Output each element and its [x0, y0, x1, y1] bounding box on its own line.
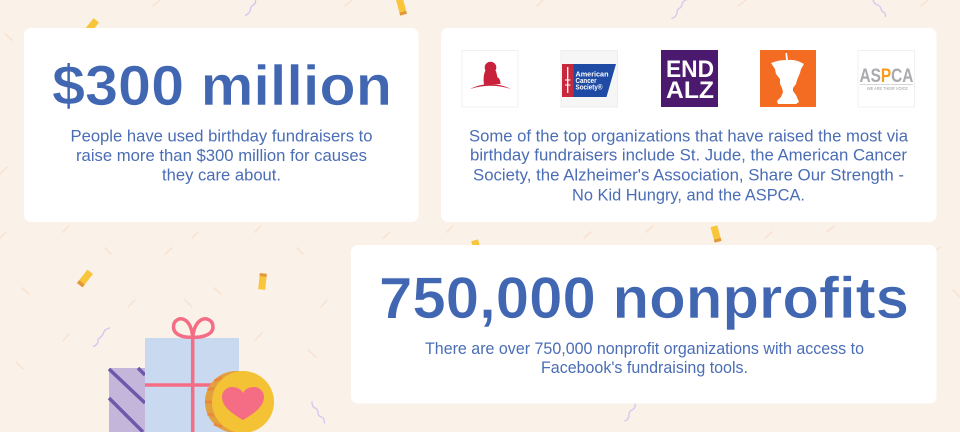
panel: 750,000 nonprofits	[351, 245, 936, 404]
icon: End Alz logo: END	[666, 56, 714, 83]
text block: top organizations: birthday fundraisers include St. Jude, the American Cancer	[470, 146, 908, 164]
icon: Share Our Strength apple core logo	[760, 50, 816, 107]
text block: birthday fundraisers: they care about.	[162, 166, 281, 184]
text block: birthday fundraisers	[70, 128, 372, 184]
text block: top organizations: No Kid Hungry, and the ASPCA.	[572, 186, 805, 204]
icon: ASPCA logo	[858, 50, 914, 107]
purple gift box	[109, 368, 145, 432]
icon: American Cancer Society logo: Cancer	[576, 78, 597, 85]
icon: ASPCA logo: ASPCA	[860, 64, 914, 86]
text block: birthday fundraisers: People have used birthday fundraisers to	[70, 128, 372, 146]
text block: nonprofit access: There are over 750,000 nonprofit organizations with access to	[425, 340, 864, 358]
icon: ASPCA logo: WE ARE THEIR VOICE	[867, 86, 908, 91]
text block: nonprofit access: Facebook's fundraising tools.	[541, 359, 748, 377]
text block: top organizations: Some of the top organizations that have raised the most via	[469, 128, 909, 146]
icon: End Alz logo	[661, 50, 718, 107]
icon: St. Jude logo	[462, 50, 518, 107]
icon: American Cancer Society logo: Society®	[576, 84, 603, 92]
text block: nonprofit access	[425, 340, 864, 377]
heading: 750,000 nonprofits: 750,000 nonprofits	[379, 266, 909, 331]
panel: $300 million	[24, 28, 418, 222]
heading: $300 million: $300 million	[52, 54, 392, 118]
icon: End Alz logo: ALZ	[666, 77, 714, 104]
icon: American Cancer Society logo: American	[576, 72, 608, 78]
blue gift box with ribbon	[145, 319, 239, 432]
heart coin	[205, 371, 274, 432]
panel: top organizations	[441, 28, 936, 222]
text block: top organizations	[469, 128, 909, 204]
text block: birthday fundraisers: raise more than $300 million for causes	[76, 147, 367, 165]
text block: top organizations: Society, the Alzheimer's Association, Share Our Strength -	[473, 166, 904, 184]
icon: gift boxes and heart coin	[109, 319, 274, 432]
icon: American Cancer Society logo	[561, 50, 618, 107]
